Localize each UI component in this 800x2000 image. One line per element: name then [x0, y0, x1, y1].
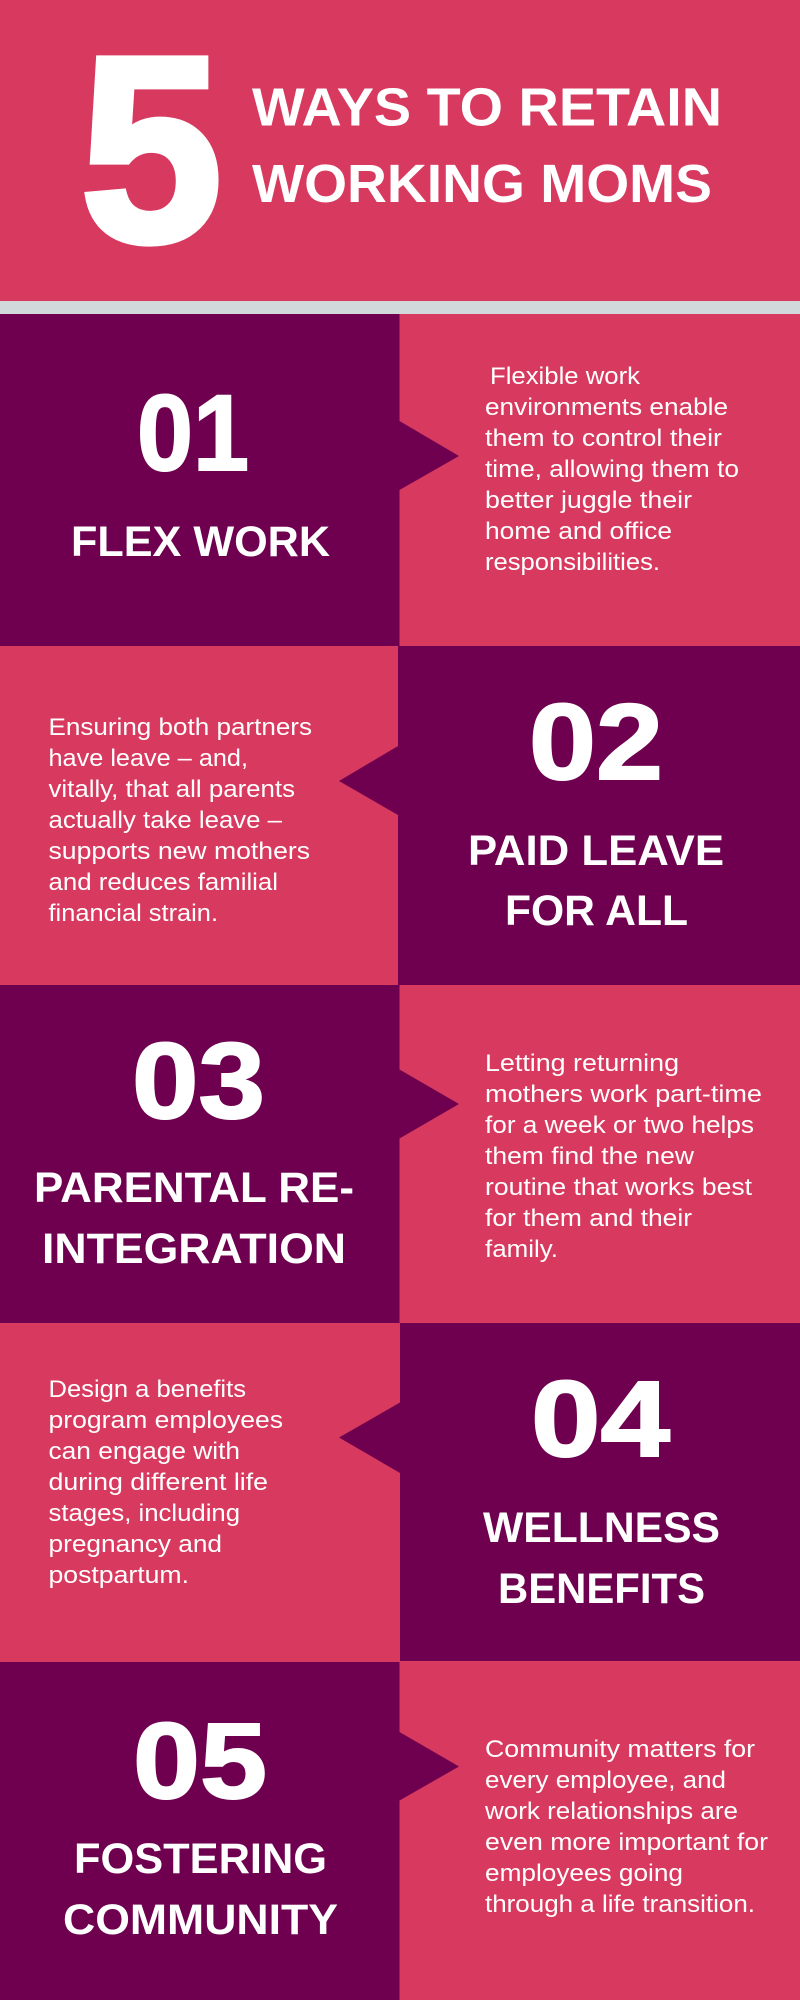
- heading: parental re-integration: INTEGRATION: [42, 1225, 346, 1273]
- body text 04: can engage with: [48, 1438, 240, 1465]
- body text 02: [48, 714, 312, 927]
- heading: wellness benefits: [483, 1504, 720, 1613]
- body text 01: Flexible work: [490, 363, 641, 390]
- body text 04: pregnancy and: [48, 1531, 222, 1558]
- body text 02: supports new mothers: [48, 838, 310, 865]
- body text 03: family.: [485, 1236, 558, 1263]
- body text 02: vitally, that all parents: [48, 776, 295, 803]
- body text 03: for a week or two helps: [485, 1112, 754, 1139]
- body text 04: stages, including: [48, 1500, 240, 1527]
- panel: 02 paid leave for all: [48, 646, 800, 985]
- body text 04: Design a benefits: [48, 1376, 246, 1403]
- body text 02: and reduces familial: [48, 869, 278, 896]
- heading: fostering community: COMMUNITY: [63, 1896, 338, 1944]
- body text 03: Letting returning: [485, 1050, 679, 1077]
- body text 01: environments enable: [485, 394, 728, 421]
- heading: flex work: FLEX WORK: [71, 518, 330, 566]
- heading: paid leave for all: [468, 827, 724, 935]
- heading: wellness benefits: WELLNESS: [483, 1504, 720, 1552]
- number 03: 03: [132, 1020, 265, 1141]
- body text 04: [48, 1376, 283, 1589]
- body text 05: through a life transition.: [485, 1891, 755, 1918]
- heading: paid leave for all: FOR ALL: [505, 887, 688, 935]
- panel: 05 fostering community: [0, 1662, 768, 2000]
- body text 05: every employee, and: [485, 1767, 726, 1794]
- body text 01: them to control their: [485, 425, 722, 452]
- body text 04: program employees: [48, 1407, 283, 1434]
- body text 04: during different life: [48, 1469, 268, 1496]
- body text 02: actually take leave –: [48, 807, 283, 834]
- body text 01: time, allowing them to: [485, 456, 739, 483]
- title: WAYS TO RETAIN: [252, 78, 722, 138]
- grey divider band: [0, 301, 800, 314]
- body text 03: them find the new: [485, 1143, 695, 1170]
- heading: paid leave for all: PAID LEAVE: [468, 827, 724, 875]
- body text 03: [485, 1050, 762, 1263]
- body text 04: postpartum.: [48, 1562, 189, 1589]
- header panel: [0, 0, 800, 301]
- body text 02: financial strain.: [48, 900, 218, 927]
- panel: 03 parental re-integration: [0, 985, 762, 1323]
- body text 05: work relationships are: [484, 1798, 738, 1825]
- body text 01: [485, 363, 739, 576]
- body text 05: even more important for: [485, 1829, 768, 1856]
- body text 05: Community matters for: [485, 1736, 755, 1763]
- body text 03: mothers work part-time: [485, 1081, 762, 1108]
- body text 01: responsibilities.: [485, 549, 660, 576]
- heading: fostering community: FOSTERING: [74, 1835, 327, 1883]
- body text 05: employees going: [485, 1860, 683, 1887]
- body text 05: [484, 1736, 768, 1918]
- heading: parental re-integration: PARENTAL RE-: [34, 1164, 354, 1212]
- panel: 04 wellness benefits: [48, 1323, 800, 1661]
- number 02: 02: [529, 681, 663, 802]
- number 01: 01: [137, 372, 249, 493]
- heading: wellness benefits: BENEFITS: [498, 1565, 705, 1613]
- dark block with right arrow: [0, 314, 459, 646]
- body text 03: for them and their: [485, 1205, 692, 1232]
- heading: fostering community: [63, 1835, 338, 1944]
- dark block with right arrow: [0, 1662, 459, 2000]
- body text 03: routine that works best: [485, 1174, 752, 1201]
- panel: 01 flex work: [0, 314, 739, 646]
- dark block with left arrow: [339, 1323, 800, 1661]
- body text 02: Ensuring both partners: [48, 714, 312, 741]
- big number 5: 5: [80, 2, 222, 296]
- body text 01: home and office: [485, 518, 672, 545]
- body text 01: better juggle their: [485, 487, 692, 514]
- dark block with left arrow: [339, 646, 800, 985]
- body text 02: have leave – and,: [48, 745, 248, 772]
- title: [252, 78, 722, 214]
- number 04: 04: [531, 1358, 670, 1479]
- heading: parental re-integration: [34, 1164, 354, 1273]
- title: WORKING MOMS: [252, 154, 712, 214]
- number 05: 05: [133, 1700, 267, 1821]
- dark block with right arrow: [0, 985, 459, 1323]
